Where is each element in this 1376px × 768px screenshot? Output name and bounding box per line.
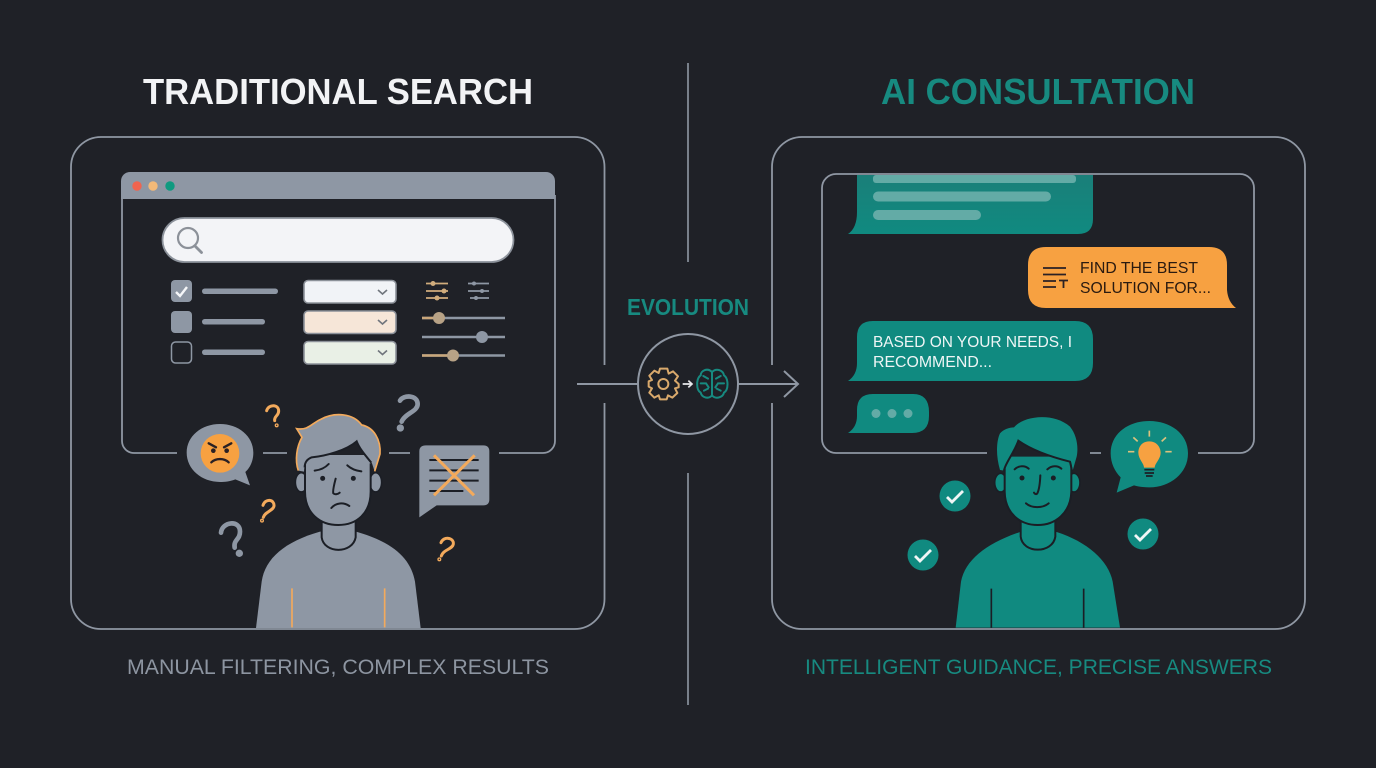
panel: browser window [121, 172, 555, 453]
head [1005, 457, 1071, 525]
recommendation text: BASED ON YOUR NEEDS, I [873, 334, 1072, 351]
chat window outline [822, 174, 1254, 453]
person: satisfied user [956, 417, 1120, 628]
panel: chat window [822, 174, 1254, 453]
ears [995, 473, 1007, 492]
hair [296, 415, 380, 472]
face [315, 464, 361, 508]
subtitle: traditional search: MANUAL FILTERING, COMPLEX RESULTS [127, 656, 549, 679]
search bar [162, 218, 514, 262]
title: AI consultation: AI CONSULTATION [881, 71, 1195, 112]
question mark [267, 406, 279, 426]
question text: FIND THE BEST [1080, 260, 1198, 277]
chat bubble: assistant text lines [848, 175, 1093, 234]
center divider [687, 63, 689, 705]
torso [256, 532, 421, 628]
question mark [261, 500, 274, 521]
torso [956, 532, 1120, 628]
filter checkboxes [171, 280, 278, 363]
window controls [132, 181, 175, 191]
title: traditional search: TRADITIONAL SEARCH [143, 71, 533, 112]
person: frustrated user [256, 415, 421, 628]
icon: gear to brain [649, 369, 727, 399]
chat bubble: user question [1028, 247, 1236, 308]
chat bubble: typing [848, 394, 929, 433]
question mark [439, 538, 453, 560]
neck [322, 518, 356, 550]
dropdown menus [304, 280, 396, 364]
question mark [221, 523, 241, 555]
icon: brain [697, 370, 727, 398]
question mark [399, 397, 418, 429]
neck [1021, 520, 1055, 550]
question text: SOLUTION FOR... [1080, 280, 1211, 297]
check badge [908, 540, 938, 570]
ears [295, 473, 307, 492]
subtitle: AI consultation: INTELLIGENT GUIDANCE, PRECISE ANSWERS [805, 656, 1272, 679]
icon: crossed-out results bubble [419, 445, 489, 517]
label: evolution: EVOLUTION [627, 294, 749, 320]
hair [997, 417, 1077, 471]
browser outline [122, 195, 555, 453]
arrow: evolution flow [577, 334, 798, 434]
icon: angry face speech bubble [187, 424, 253, 485]
small arrow [683, 381, 692, 387]
head [305, 455, 371, 525]
filter icons and sliders [422, 281, 505, 362]
check badge [940, 480, 970, 512]
face [1015, 466, 1061, 507]
check badge [1128, 518, 1158, 550]
panel: traditional search frame [71, 137, 604, 629]
browser title bar [121, 172, 555, 199]
icon: magnifier [178, 228, 202, 252]
icon: check badges [908, 480, 1158, 570]
icon: text lines [1043, 268, 1068, 288]
icon: lightbulb speech bubble [1111, 421, 1188, 493]
recommendation text: RECOMMEND... [873, 354, 992, 371]
question marks [221, 397, 453, 560]
chat bubble: recommendation [848, 321, 1093, 381]
icon: gear [649, 369, 679, 399]
panel: AI consultation frame [772, 137, 1305, 629]
